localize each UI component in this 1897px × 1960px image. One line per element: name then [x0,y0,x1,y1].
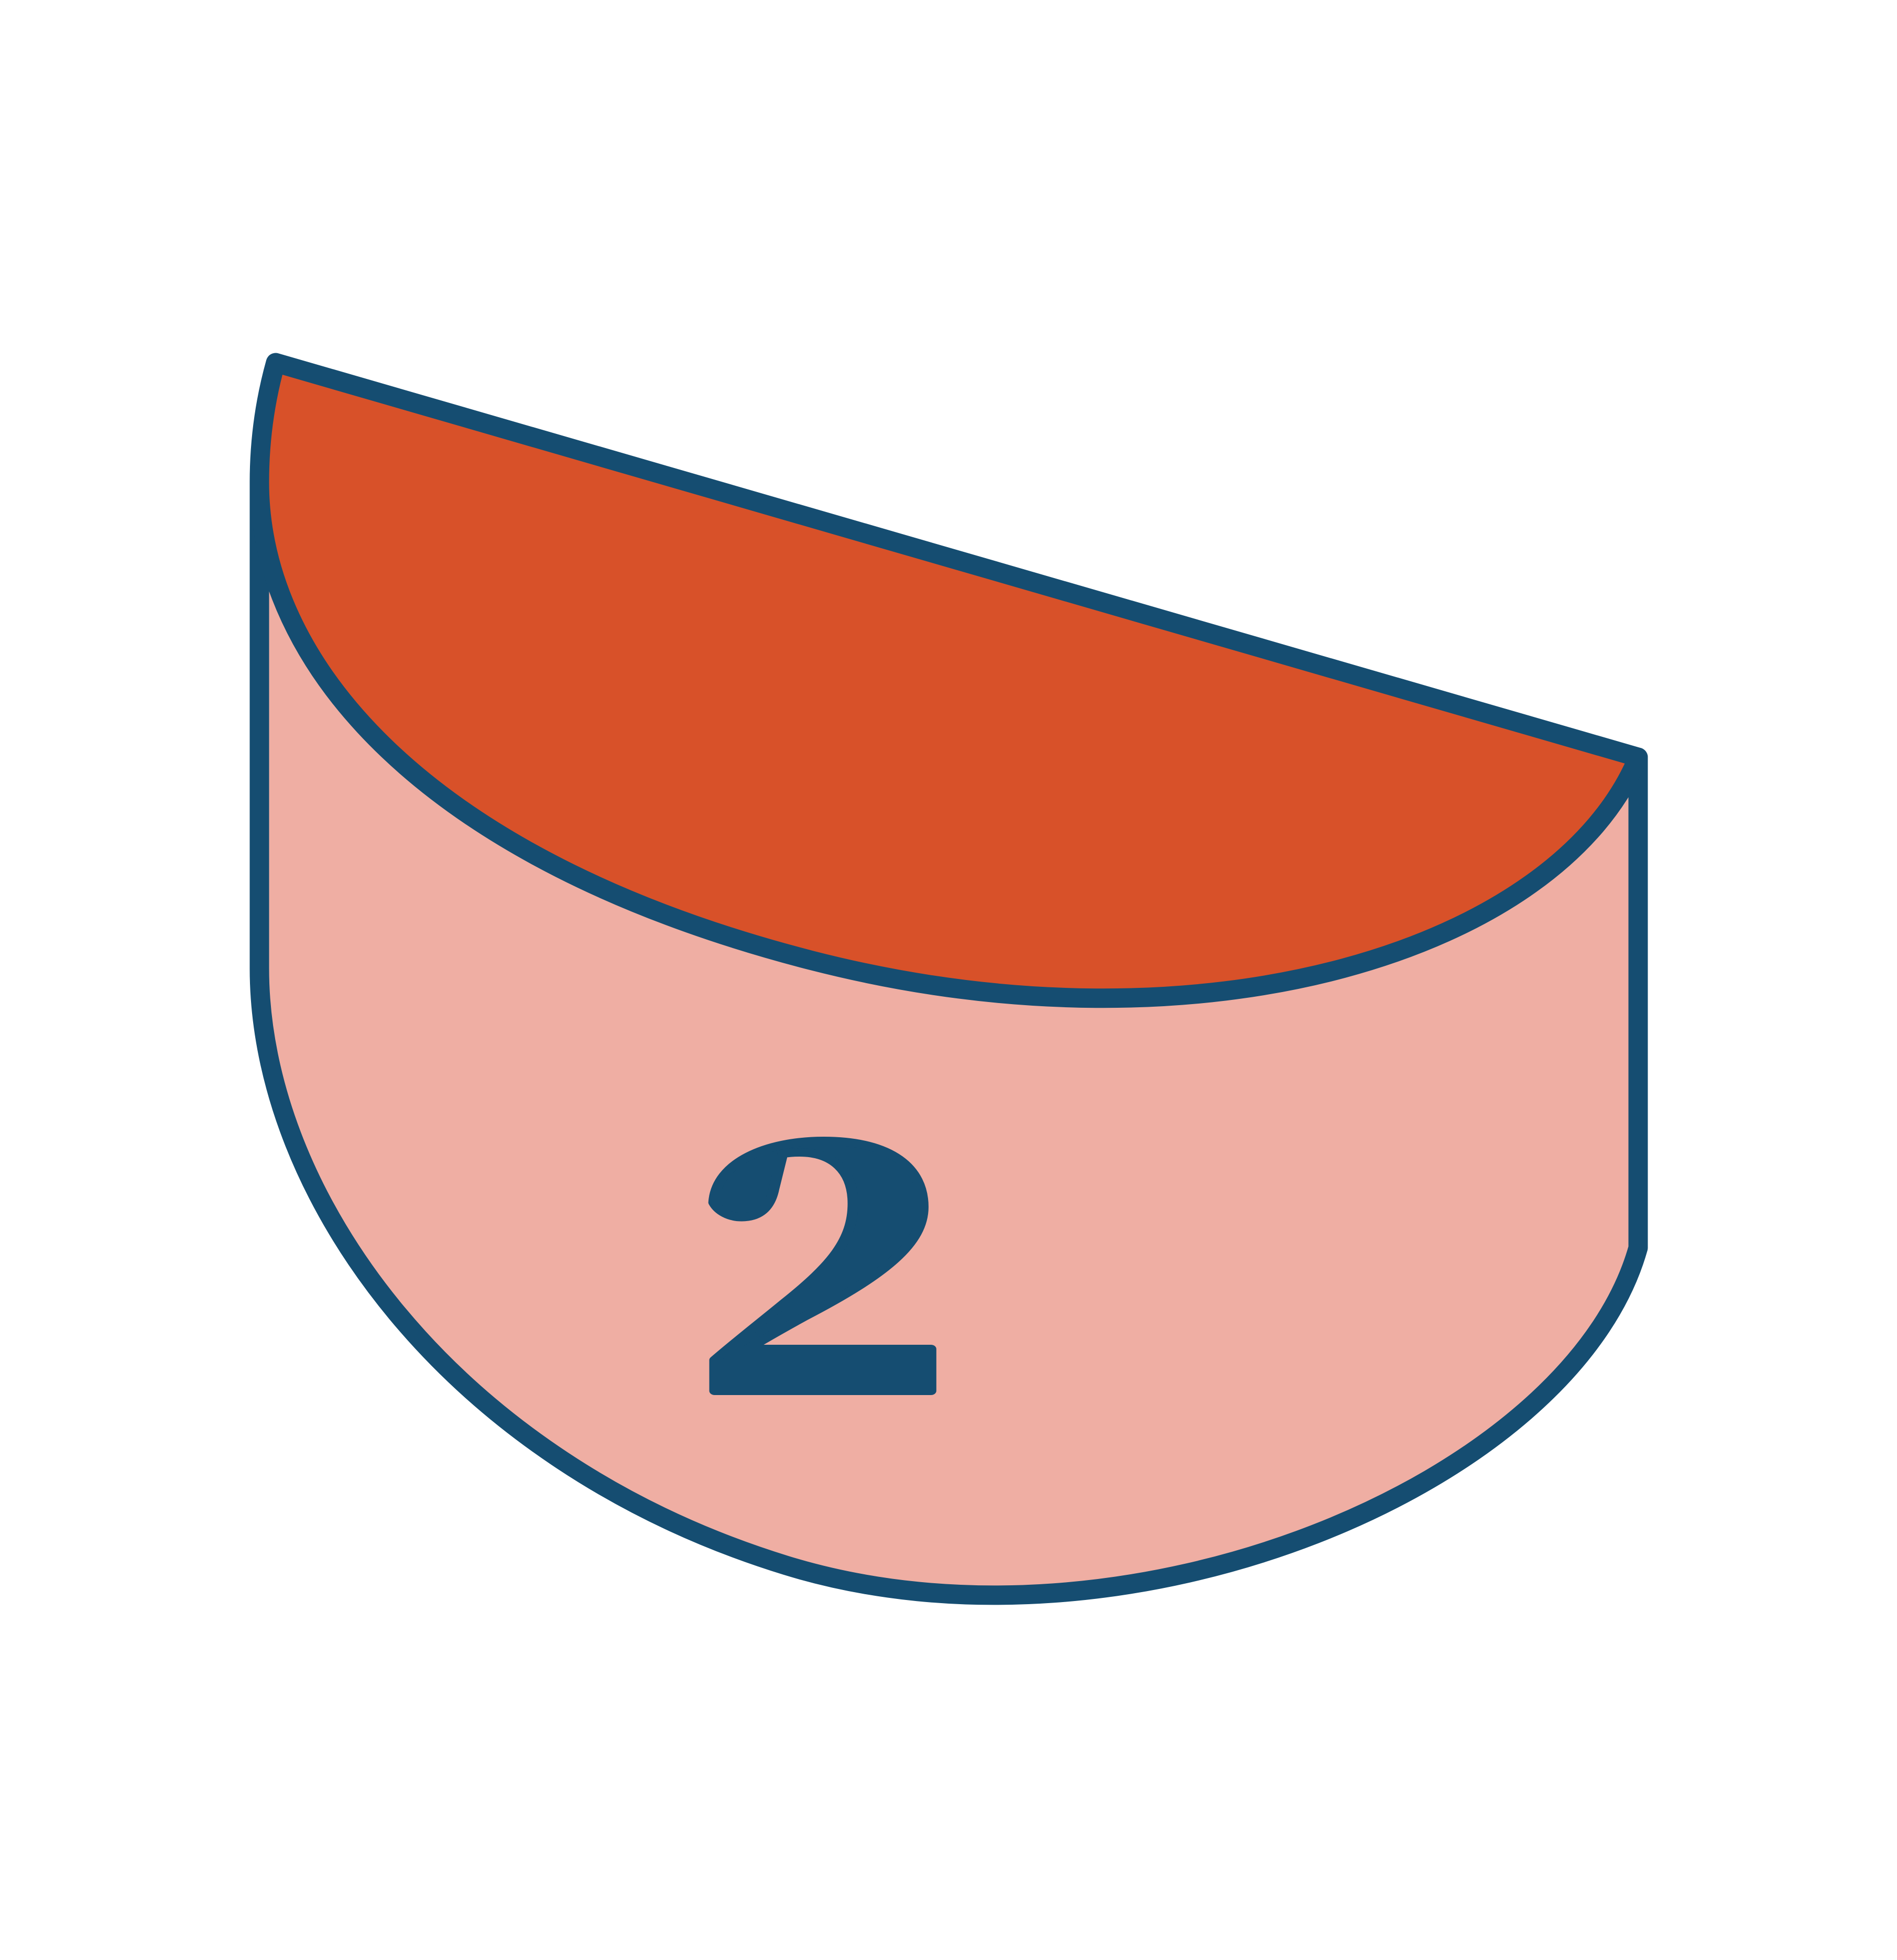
number 2: 2 [689,999,952,1489]
cylinder body [259,482,1638,1595]
orange cut top face [259,363,1638,998]
